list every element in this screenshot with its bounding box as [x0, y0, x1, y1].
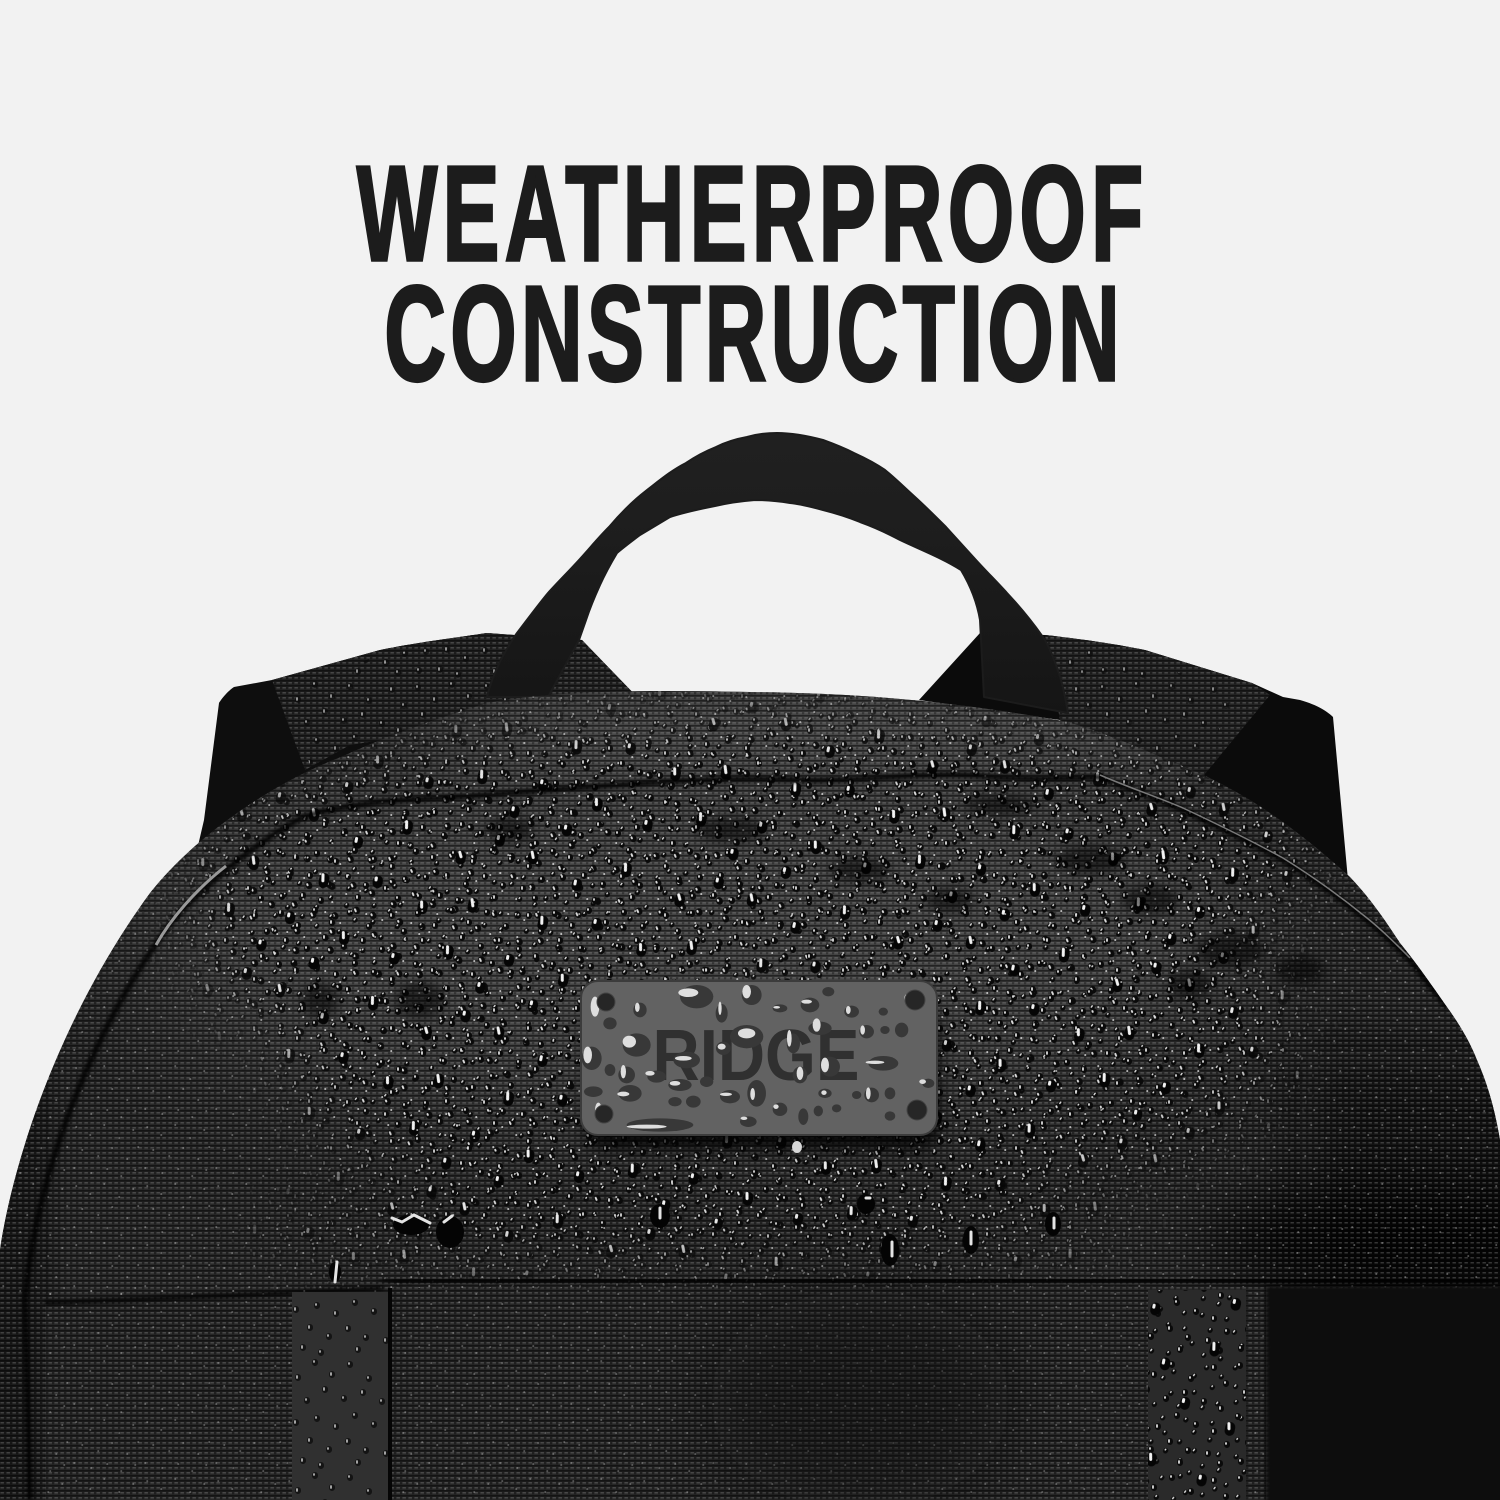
droplet below badge — [792, 1141, 802, 1153]
pocket panel — [45, 1280, 1500, 1500]
badge plate — [581, 981, 937, 1135]
badge droplets — [582, 985, 934, 1132]
dome seam — [25, 775, 1447, 1500]
left shoulder pad — [190, 633, 640, 880]
right shadow region — [1266, 1286, 1500, 1500]
right webbing strip — [1148, 1290, 1246, 1500]
badge shadow — [586, 1008, 938, 1148]
ridge badge — [581, 981, 938, 1153]
right shoulder pad — [919, 633, 1348, 880]
title: WEATHERPROOF — [357, 138, 1143, 289]
lighting: soft highlights and shadows — [0, 694, 1500, 1500]
large droplet cluster — [329, 1194, 1061, 1282]
title — [357, 138, 1143, 409]
main body dome — [0, 680, 1500, 1500]
title: CONSTRUCTION — [384, 258, 1120, 409]
badge screws — [595, 990, 927, 1123]
fabric weave — [0, 680, 1500, 1500]
dark droplet clusters — [302, 795, 1324, 1018]
water droplets — [148, 691, 1358, 1290]
carry handle — [487, 433, 1068, 713]
left webbing strip — [292, 1288, 390, 1500]
backpack — [0, 433, 1500, 1500]
badge logo text: RIDGE — [652, 1016, 860, 1096]
